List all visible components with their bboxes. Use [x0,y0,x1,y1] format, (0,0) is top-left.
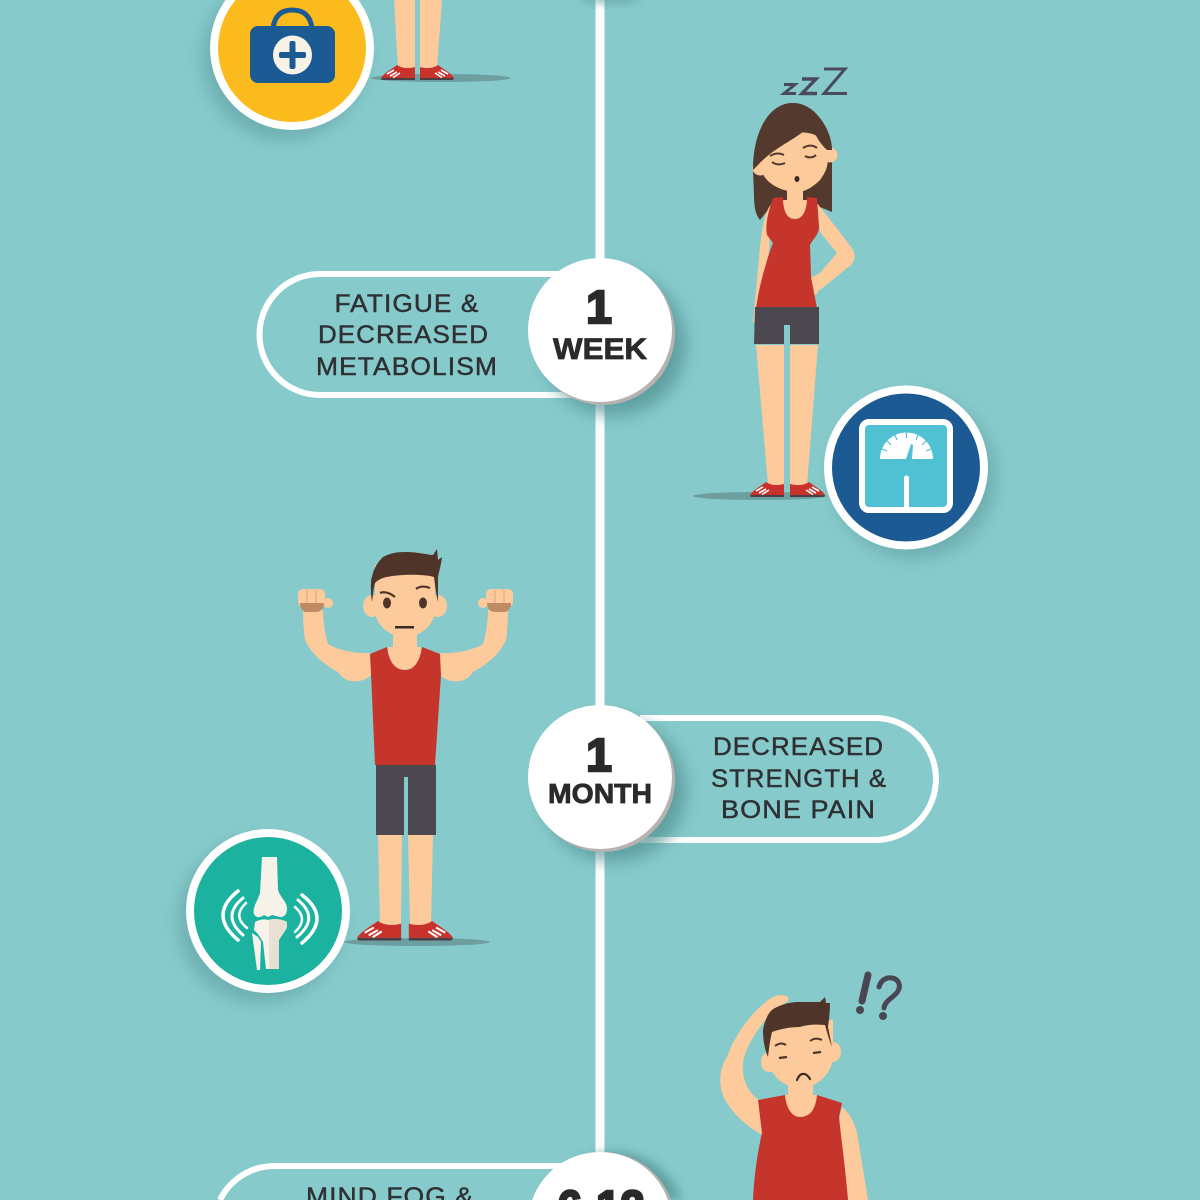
tank top [753,1095,848,1200]
exclamation and question marks [856,975,899,1020]
time node: 1 month: MONTH [548,778,652,809]
label text: METABOLISM [316,353,498,381]
arms [753,203,772,322]
tank top [756,197,819,308]
shadow of cropped top node [580,0,640,3]
tank top [370,647,441,765]
label text: STRENGTH & [711,765,887,793]
time node: 1 week: WEEK [553,333,647,366]
panel: 1 month strength [528,705,936,862]
label text: FATIGUE & [334,290,480,318]
label text [711,733,887,824]
sleep letters [784,69,847,94]
ears [761,1052,777,1072]
neck and chest [782,185,807,219]
panel: 1 week fatigue [260,258,686,416]
label text: BONE PAIN [721,796,876,824]
shorts [754,307,819,344]
raised arm [720,995,789,1135]
label text [316,290,498,381]
label pill outline [640,718,936,840]
arms [303,610,371,681]
hair [371,549,442,602]
neck and chest [388,630,421,670]
legs [378,835,402,925]
fringe [753,103,832,170]
icon: medical bag [202,0,374,140]
icon: weight scale [824,386,996,559]
shorts [376,765,436,835]
fists [298,589,513,612]
figure: woman legs at top [371,0,511,82]
neck and chest [785,1080,817,1117]
label pill outline [260,274,590,395]
figure: confused man [720,975,899,1200]
right arm [839,1107,868,1200]
time node: 1 week: 1 [586,281,612,333]
hair back [753,103,832,220]
face [768,1020,833,1088]
figure: man flexing [298,549,513,946]
label text: DECREASED [318,321,489,349]
time node: 1 week [528,258,686,416]
face [375,565,435,637]
label text: DECREASED [713,733,884,761]
ears [363,595,381,617]
label pill outline [220,1166,590,1200]
icon: knee joint [178,829,350,1003]
time node: 1 month [528,705,686,862]
time node: 6-12 [532,1152,682,1200]
time node: 1 month: 1 [586,729,612,781]
figure: tired woman [693,69,855,500]
panel: 6-12 months mind fog [220,1152,682,1200]
ears [752,160,768,176]
legs [756,345,784,485]
timeline vertical line [596,0,604,1200]
hair [763,997,832,1057]
face [760,132,828,192]
